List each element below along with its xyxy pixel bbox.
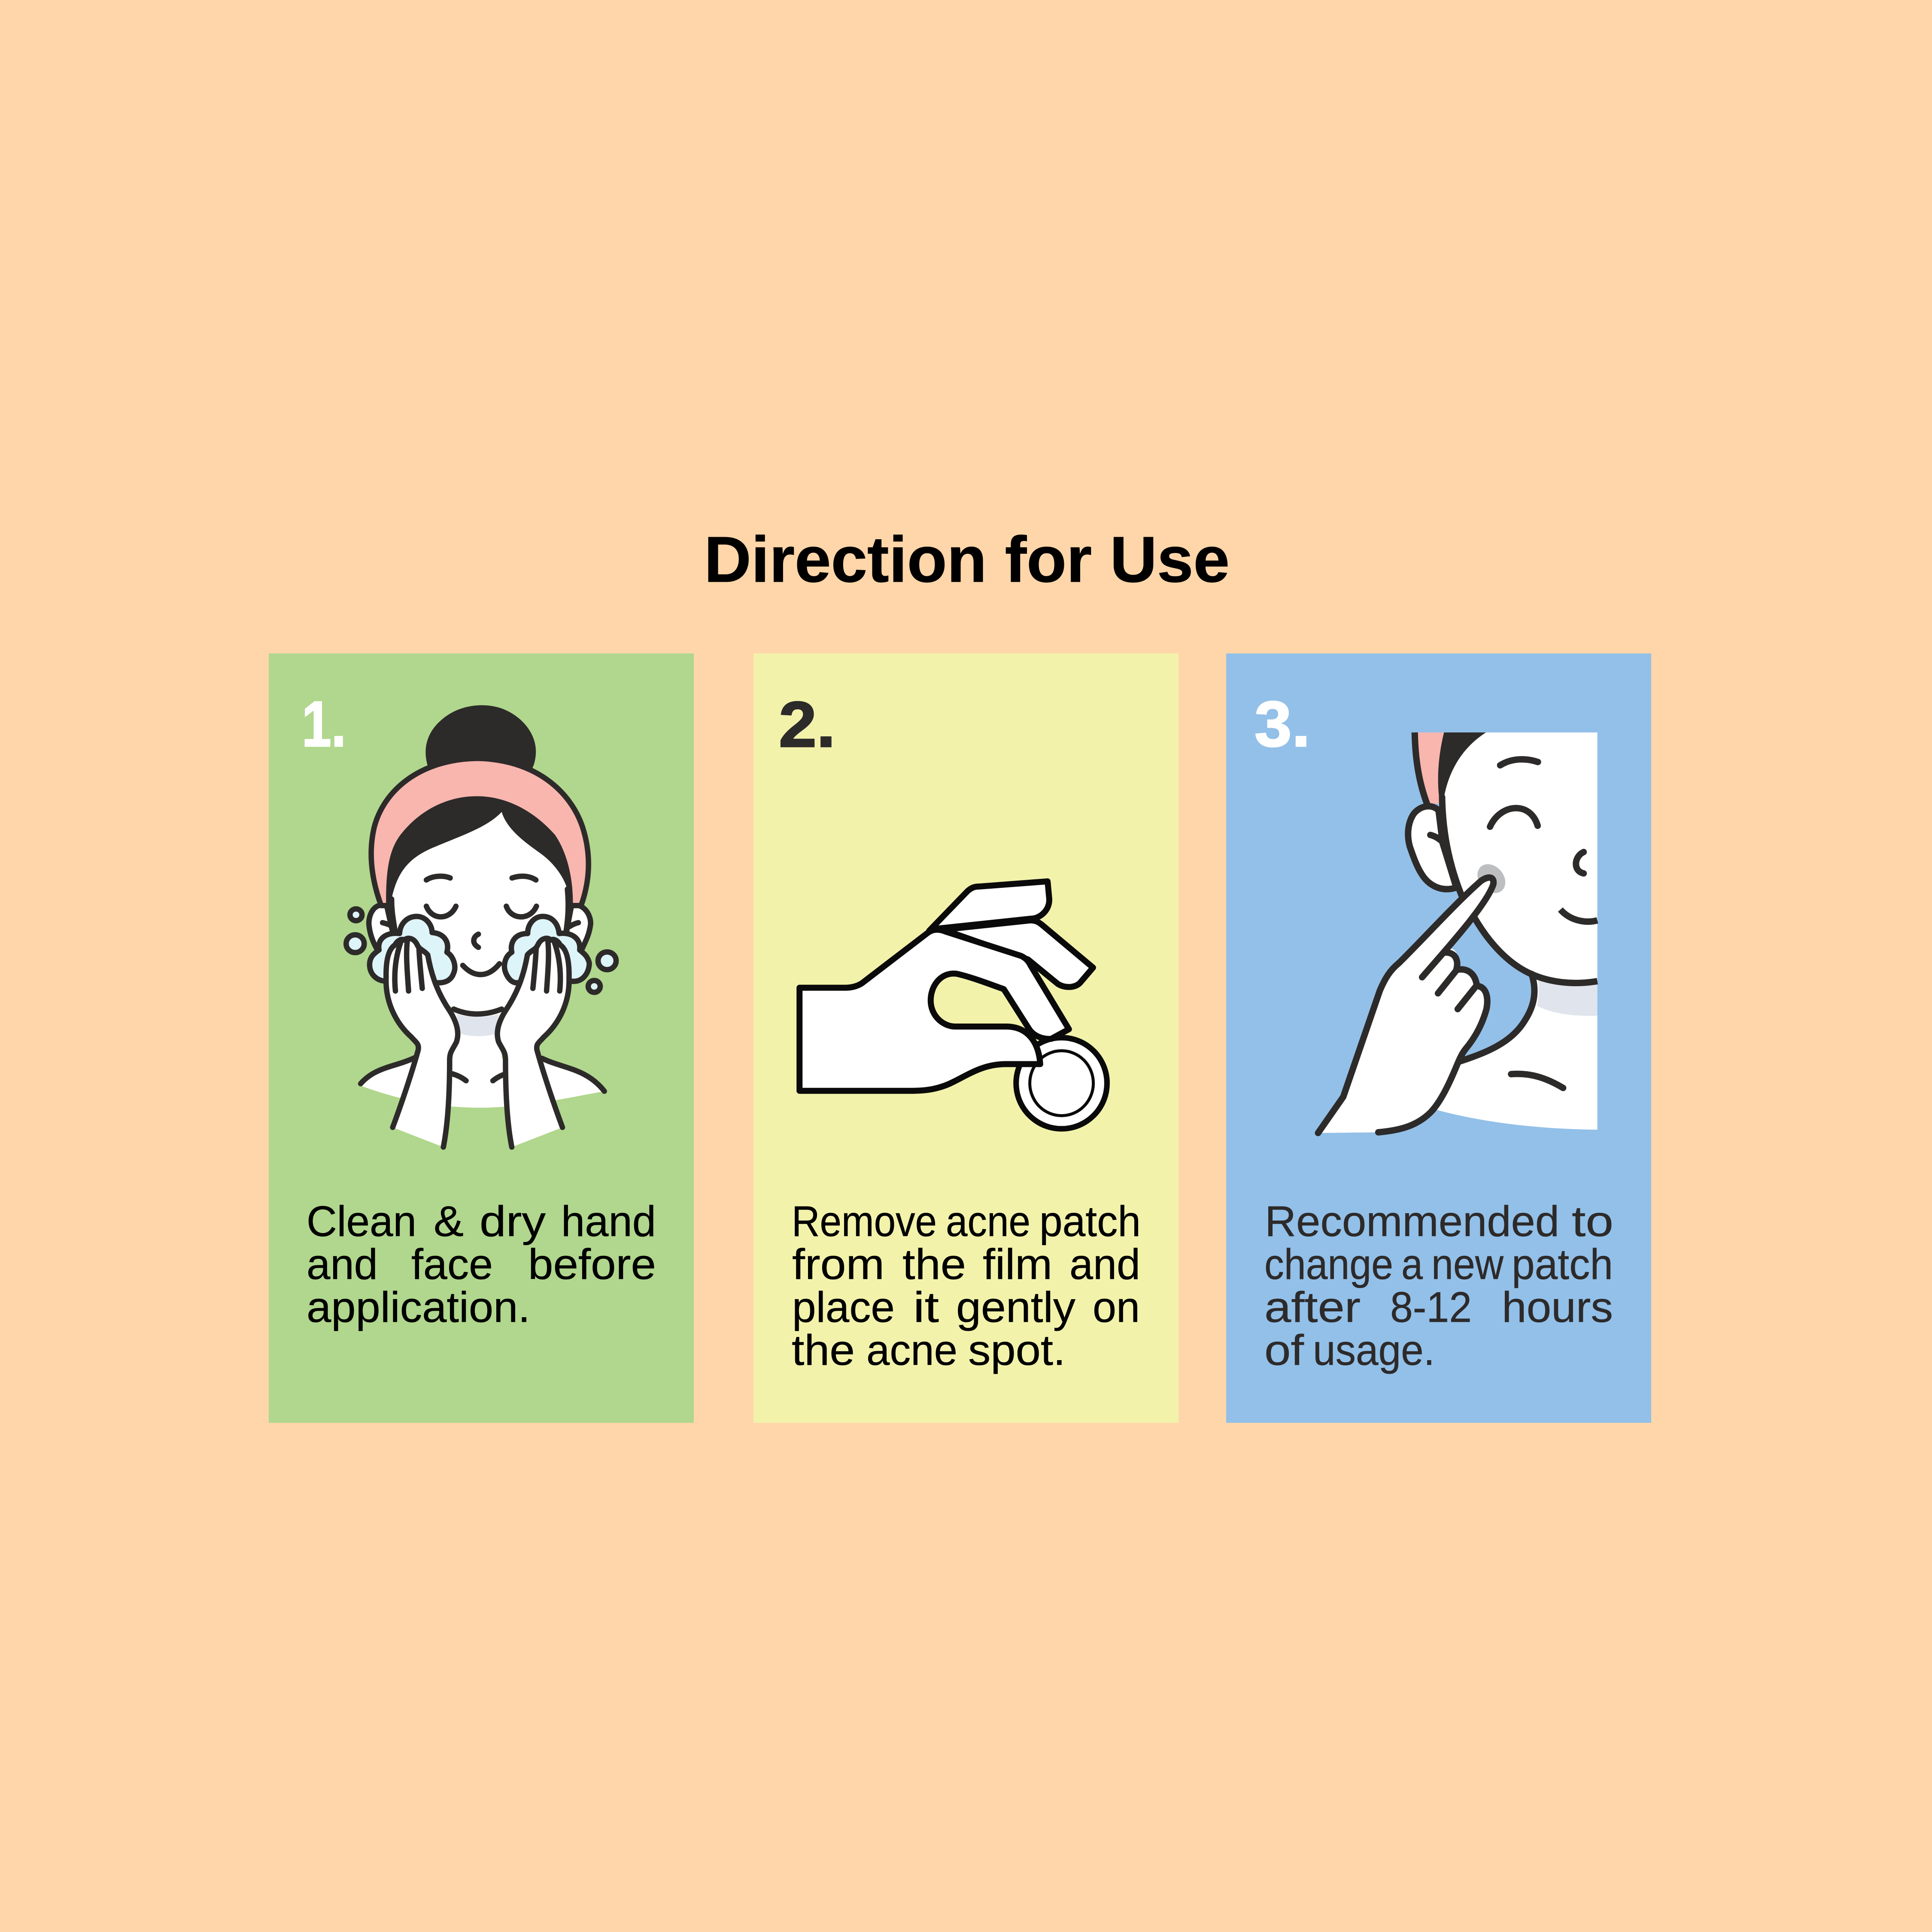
text: step 1 instructions [307,1197,656,1331]
text: step 2 instructions: patch [1039,1197,1141,1245]
text: step 3 instructions: patch [1512,1240,1613,1288]
text: step 1 instructions: before [528,1240,656,1288]
text: step 2 instructions: it [913,1283,939,1331]
text: step 3 instructions: usage. [1313,1326,1435,1374]
step number 2: 2. [779,688,835,760]
icon: hand holding acne patch [799,881,1107,1129]
text: step 3 instructions: 8-12 [1390,1283,1472,1331]
text: step 2 instructions: from [792,1240,884,1288]
text: step 3 instructions: Recommended [1265,1197,1559,1245]
text: step 2 instructions: and [1069,1240,1140,1288]
text: step 1 instructions: & [434,1197,464,1245]
text: step 2 instructions: on [1093,1283,1140,1331]
text: step 2 instructions: the [902,1240,966,1288]
text: step 1 instructions: hand [561,1197,656,1245]
panel: step 2 remove and place [753,653,1179,1423]
text: step 3 instructions: to [1572,1197,1613,1245]
text: step 2 instructions: spot. [968,1326,1066,1374]
icon: woman washing face with foam [346,705,616,1147]
text: step 2 instructions [792,1197,1141,1374]
text: step 2 instructions: Remove [792,1197,937,1245]
step number 3: 3. [1255,688,1310,760]
text: step 3 instructions: hours [1502,1283,1613,1331]
text: step 1 instructions: application. [307,1283,530,1331]
text: step 2 instructions: the [792,1326,855,1374]
text: step 2 instructions: film [983,1240,1052,1288]
icon: finger pointing to patch on cheek [1318,732,1598,1133]
text: step 3 instructions: of [1264,1326,1304,1374]
text: step 1 instructions: Clean [307,1197,416,1245]
title: Direction for Use [704,523,1230,595]
text: step 3 instructions: after [1264,1283,1361,1331]
panel: step 3 change patch [1226,653,1651,1423]
text: step 1 instructions: and [307,1240,378,1288]
text: step 2 instructions: gently [956,1283,1075,1331]
text: step 1 instructions: face [411,1240,493,1288]
text: step 1 instructions: dry [480,1197,546,1245]
text: step 3 instructions: a [1401,1240,1423,1288]
text: step 2 instructions: acne [866,1326,957,1374]
step number 1: 1. [302,688,346,760]
panel: step 1 clean and dry [269,653,694,1423]
text: step 3 instructions: change [1264,1240,1393,1288]
text: step 2 instructions: acne [946,1197,1030,1245]
text: step 3 instructions [1264,1197,1613,1374]
text: step 2 instructions: place [792,1283,895,1331]
text: step 3 instructions: new [1431,1240,1504,1288]
